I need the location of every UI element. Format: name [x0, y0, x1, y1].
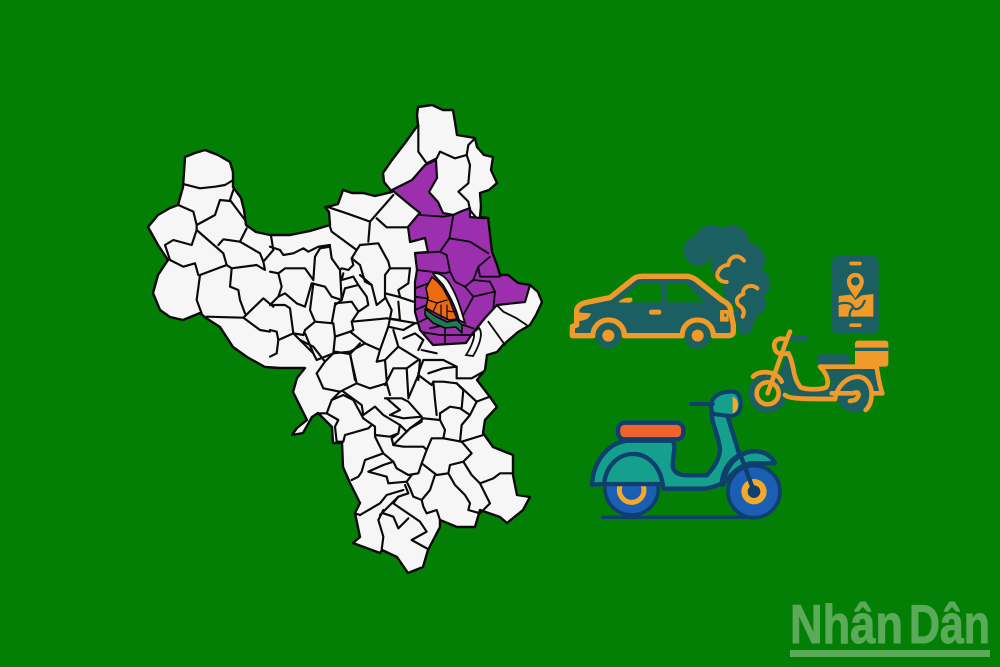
smoke swirls [717, 256, 757, 317]
rear fender arc [604, 454, 663, 484]
delivery scooter frame lines [753, 332, 882, 410]
front wheel [728, 466, 780, 518]
handlebar [692, 398, 713, 410]
map: south districts [300, 340, 512, 550]
map: purple district borders [415, 215, 527, 345]
car details [578, 298, 729, 322]
map: white river [433, 273, 465, 323]
delivery scooter box [855, 341, 888, 367]
delivery scooter seat [817, 354, 850, 365]
map [839, 294, 873, 317]
phone speaker and button [849, 262, 862, 327]
map: west districts [165, 180, 273, 332]
delivery scooter handle [790, 335, 808, 342]
scooter body [592, 413, 739, 489]
map: orange district borders [428, 300, 455, 319]
delivery scooter wheels [748, 374, 873, 413]
ground line [603, 512, 750, 522]
icon: exhaust smoke [684, 225, 770, 335]
icon: phone with map [832, 256, 879, 334]
car wheels [595, 323, 711, 349]
map: orange inner districts [426, 277, 457, 320]
map pin [846, 272, 864, 299]
seat [618, 423, 683, 439]
map: green inner districts [425, 309, 462, 333]
car body [572, 276, 733, 336]
car windows [618, 283, 704, 302]
map of Hanoi [148, 105, 542, 573]
icon: delivery scooter [748, 332, 888, 413]
fork [739, 452, 754, 492]
watermark underline [790, 650, 990, 657]
map: white river south [466, 328, 481, 356]
car tail light dot [724, 314, 726, 317]
icon: teal scooter [592, 392, 780, 518]
smoke cloud [684, 225, 770, 335]
map: north districts [418, 125, 477, 218]
icon: car [572, 276, 733, 349]
rear wheel [605, 462, 658, 515]
map: outer outline [148, 105, 542, 573]
map: purple suburban districts [392, 160, 530, 345]
watermark: Nhân Dân logo [790, 593, 990, 657]
phone body [832, 256, 879, 334]
front fender [723, 451, 775, 485]
headlight [711, 392, 741, 416]
delivery scooter body [778, 343, 882, 398]
map: central districts [270, 195, 437, 380]
watermark word: Nhân: Nhân [790, 593, 903, 655]
